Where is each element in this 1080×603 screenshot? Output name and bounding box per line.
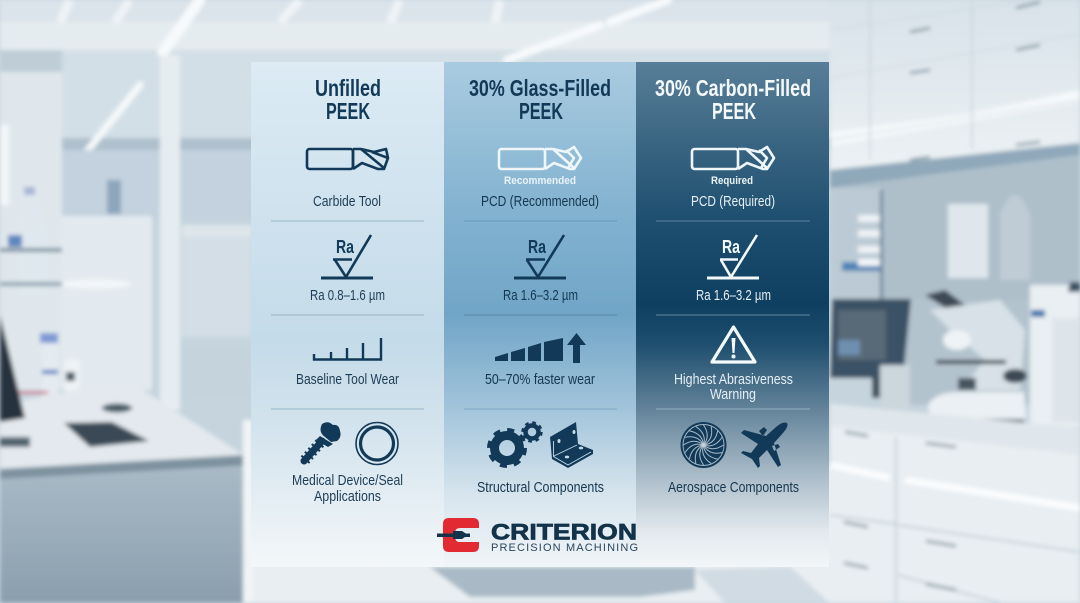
icon: surface finish Ra [514,235,566,278]
label: Highest Abrasiveness Warning [674,371,793,403]
label: Carbide Tool: Carbide Tool [313,193,381,210]
right cabinets [830,0,1080,178]
label: Medical Device/Seal Applications: Applications [314,488,381,505]
label: PCD (Required): PCD (Required) [691,193,775,210]
right wall [830,155,1080,300]
icon: gears [490,423,541,466]
label: Ra 0.8–1.6 µm: Ra 0.8–1.6 µm [310,287,385,304]
label: Aerospace Components: Aerospace Components [668,479,799,496]
label: 50–70% faster wear: 50–70% faster wear [485,371,595,388]
badge: Required: Required [711,175,753,187]
heading: 30% Glass-Filled PEEK: PEEK [519,98,563,124]
label: Structural Components: Structural Components [477,479,604,496]
icon: PCD tool [692,147,774,169]
column: Unfilled PEEK [251,62,444,567]
analyzer box [1030,285,1080,427]
label: PCD (Recommended): PCD (Recommended) [481,193,599,210]
icon: rising wear bars with arrow [495,333,586,363]
icon: dental screw [304,422,341,461]
icon: surface finish Ra: Ra [722,237,741,257]
label: Highest Abrasiveness Warning: Warning [710,386,756,403]
label: Baseline Tool Wear: Baseline Tool Wear [296,371,399,388]
icon: carbide tool [307,149,388,169]
comparison panel [251,62,829,567]
heading: Unfilled PEEK: PEEK [326,98,370,124]
back wall left [62,150,252,220]
icon: angle bracket [550,422,593,468]
logo tagline: PRECISION MACHINING [491,542,638,554]
heading: 30% Carbon-Filled PEEK: 30% Carbon-Filled [655,75,811,101]
heading: Unfilled PEEK [315,75,381,124]
icon: baseline wear ticks [314,338,381,360]
icon: surface finish Ra: Ra [336,237,355,257]
heading: Unfilled PEEK: Unfilled [315,75,381,101]
icon: PCD tool [499,147,581,169]
logo wordmark: CRITERION [491,520,637,544]
label: Highest Abrasiveness Warning: Highest Abrasiveness [674,371,793,388]
column: 30% Glass-Filled PEEK [444,62,636,567]
heading: 30% Carbon-Filled PEEK: PEEK [712,98,756,124]
icon: warning triangle [712,327,755,362]
logo: Criterion Precision Machining [437,518,638,554]
label: Medical Device/Seal Applications [292,472,403,505]
bottles and shelves [20,190,46,295]
icon: seal ring [356,422,398,464]
right counter and drawers [830,404,1080,456]
heading: 30% Glass-Filled PEEK [469,75,611,124]
floor [243,466,833,603]
icon: surface finish Ra [707,235,759,278]
icon: turbine [680,422,726,468]
label: Ra 1.6–3.2 µm: Ra 1.6–3.2 µm [503,287,578,304]
label: Medical Device/Seal Applications: Medical Device/Seal [292,472,403,489]
icon: airplane [741,422,788,468]
bench [0,388,245,470]
icon: surface finish Ra: Ra [528,237,547,257]
column: 30% Carbon-Filled PEEK [636,62,829,567]
heading: 30% Glass-Filled PEEK: 30% Glass-Filled [469,75,611,101]
microscope [925,290,965,312]
monitor [830,299,911,378]
badge: Recommended: Recommended [504,175,576,187]
ceiling [0,0,830,22]
label: Ra 1.6–3.2 µm: Ra 1.6–3.2 µm [696,287,771,304]
heading: 30% Carbon-Filled PEEK [655,75,811,124]
icon: surface finish Ra [321,235,373,278]
logo mark [437,518,479,552]
